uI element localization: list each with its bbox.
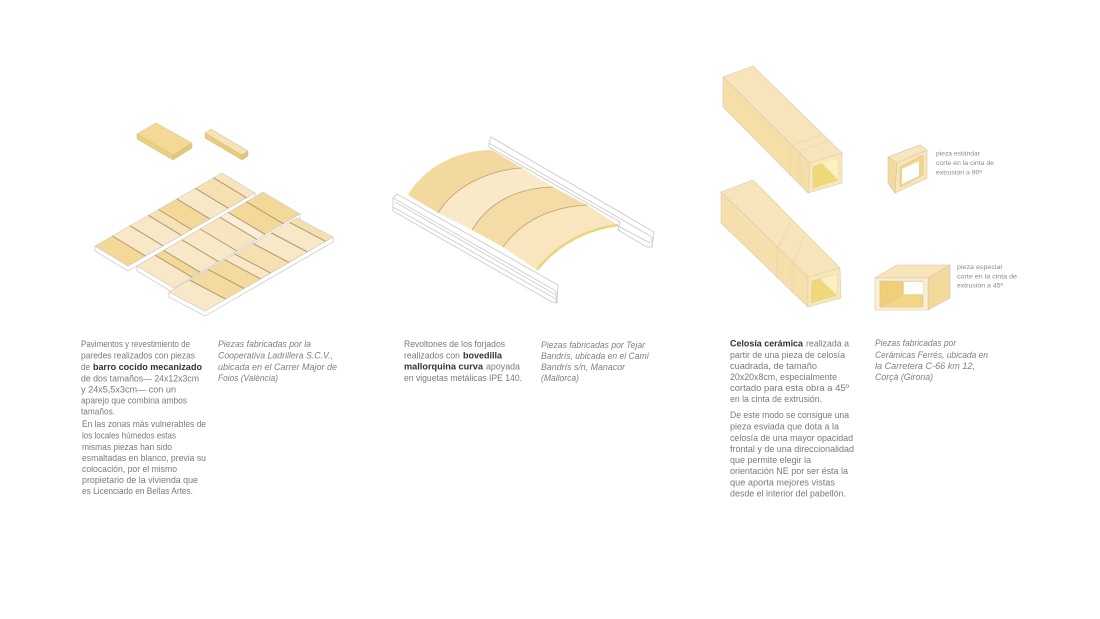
text block: lattice manufacturer: la Carretera C-66 km 12, (875, 360, 975, 371)
text block: lattice manufacturer: Piezas fabricadas por (875, 337, 957, 348)
floor: back band of tiles (95, 173, 255, 271)
text block: vault manufacturer: Bandrís s/n, Manacor (541, 361, 626, 372)
text block: paving description: mismas piezas han sido (82, 441, 172, 452)
standard long lattice (723, 66, 842, 193)
text block: lattice description: 20x20x8cm, especialmente (730, 371, 837, 382)
text block: paving description: paredes realizados con piezas (81, 350, 195, 360)
text block: lattice manufacturer (875, 337, 988, 382)
label: special piece: extrusión a 45º (957, 282, 1004, 290)
text block: paving description: los locales húmedos estas (82, 430, 176, 440)
text block: lattice manufacturer: Cerámicas Ferrés, ubicada en (875, 349, 988, 360)
text block: lattice description: orientación NE por ser ésta la (730, 465, 849, 476)
label: standard piece (936, 152, 995, 176)
text block: paving description: propietario de la vivienda que (82, 474, 198, 485)
text block: vault description: Revoltones de los forjados (404, 338, 505, 349)
back steel beam (489, 137, 654, 247)
text block: paving manufacturer: Piezas fabricadas por la (218, 338, 311, 349)
text block: vault description: realizados con (404, 350, 460, 360)
text block: paving description: de (81, 361, 90, 372)
text block: lattice description: que aporta mejores vistas (730, 476, 835, 488)
text block: paving description (81, 338, 206, 496)
text block: vault manufacturer: (Mallorca) (541, 372, 579, 383)
icon: large brick (137, 123, 192, 160)
text block: vault description: en viguetas metálicas IPE 140. (404, 372, 522, 383)
special long lattice (721, 180, 841, 307)
text block: lattice description: realizada a (806, 338, 850, 348)
text block: paving description: barro cocido mecanizado (93, 361, 202, 372)
text block: paving description: es Licenciado en Bellas Artes. (82, 485, 193, 496)
text block: paving description: y 24x5,5x3cm— con un (81, 384, 176, 394)
text block: paving manufacturer: ubicada en el Carrer Major de (218, 361, 337, 372)
text block: vault manufacturer (541, 339, 650, 383)
text block: vault description (404, 338, 522, 383)
floor: front band of tiles (169, 218, 333, 316)
text block: paving manufacturer: Foios (València) (218, 372, 278, 383)
label: special piece (957, 265, 1018, 290)
front steel beam (393, 194, 558, 303)
icon: special lattice piece (875, 265, 950, 310)
text block: lattice description: celosía de una mayor opacidad (730, 432, 853, 443)
text block: vault description: bovedilla (463, 350, 503, 360)
text block: vault manufacturer: Piezas fabricadas por Tejar (541, 339, 646, 350)
text block: lattice description: frontal y de una direccionalidad (730, 443, 854, 454)
icon: narrow brick (205, 129, 248, 160)
text block: lattice description (730, 338, 854, 498)
illustration: long ceramic lattice pieces (721, 66, 842, 307)
illustration: curved vault between steel beams (393, 137, 654, 303)
text block: lattice description: partir de una pieza de celosía (730, 349, 846, 360)
label: special piece: pieza especial (957, 265, 1002, 271)
text block: paving description: Pavimentos y revestimiento de (81, 338, 190, 349)
floor: middle band of tiles (137, 192, 300, 293)
text block: paving description: de dos tamaños— 24x12x3cm (81, 372, 199, 384)
vault sections (408, 150, 618, 270)
text block: lattice description: en la cinta de extrusión. (730, 393, 822, 404)
text block: paving description: En las zonas más vulnerables de (82, 418, 206, 429)
text block: lattice description: cortado para esta obra a 45º (730, 382, 850, 393)
text block: paving description: aparejo que combina ambos (81, 394, 187, 406)
icon: standard lattice piece (888, 145, 927, 193)
text block: vault description: mallorquina curva (404, 360, 484, 372)
text block: lattice manufacturer: Corçà (Girona) (875, 371, 933, 382)
label: special piece: corte en la cinta de (957, 274, 1018, 280)
label: standard piece: pieza estándar (936, 152, 980, 158)
text block: vault description: apoyada (486, 360, 521, 372)
text block: paving manufacturer: Cooperativa Ladrillera S.C.V., (218, 350, 333, 360)
text block: lattice description: desde el interior del pabellón. (730, 488, 846, 498)
illustration: brick pieces and floor (95, 123, 333, 316)
text block: lattice description: que permite elegir la (730, 454, 812, 465)
label: standard piece: corte en la cinta de (936, 161, 995, 167)
text block: lattice description: De este modo se consigue una (730, 409, 850, 420)
text block: paving description: esmaltadas en blanco, previa su (82, 452, 206, 463)
text block: lattice description: Celosía cerámica (730, 338, 804, 348)
text block: vault manufacturer: Bandrís, ubicada en el Camí (541, 350, 650, 361)
text block: paving manufacturer (218, 338, 337, 383)
label: standard piece: extrusión a 90º (936, 170, 983, 176)
text block: paving description: tamaños. (81, 406, 115, 416)
text block: lattice description: pieza esviada que dota a la (730, 420, 840, 432)
text block: paving description: colocación, por el mismo (82, 463, 177, 474)
text block: lattice description: cuadrada, de tamaño (730, 360, 817, 371)
